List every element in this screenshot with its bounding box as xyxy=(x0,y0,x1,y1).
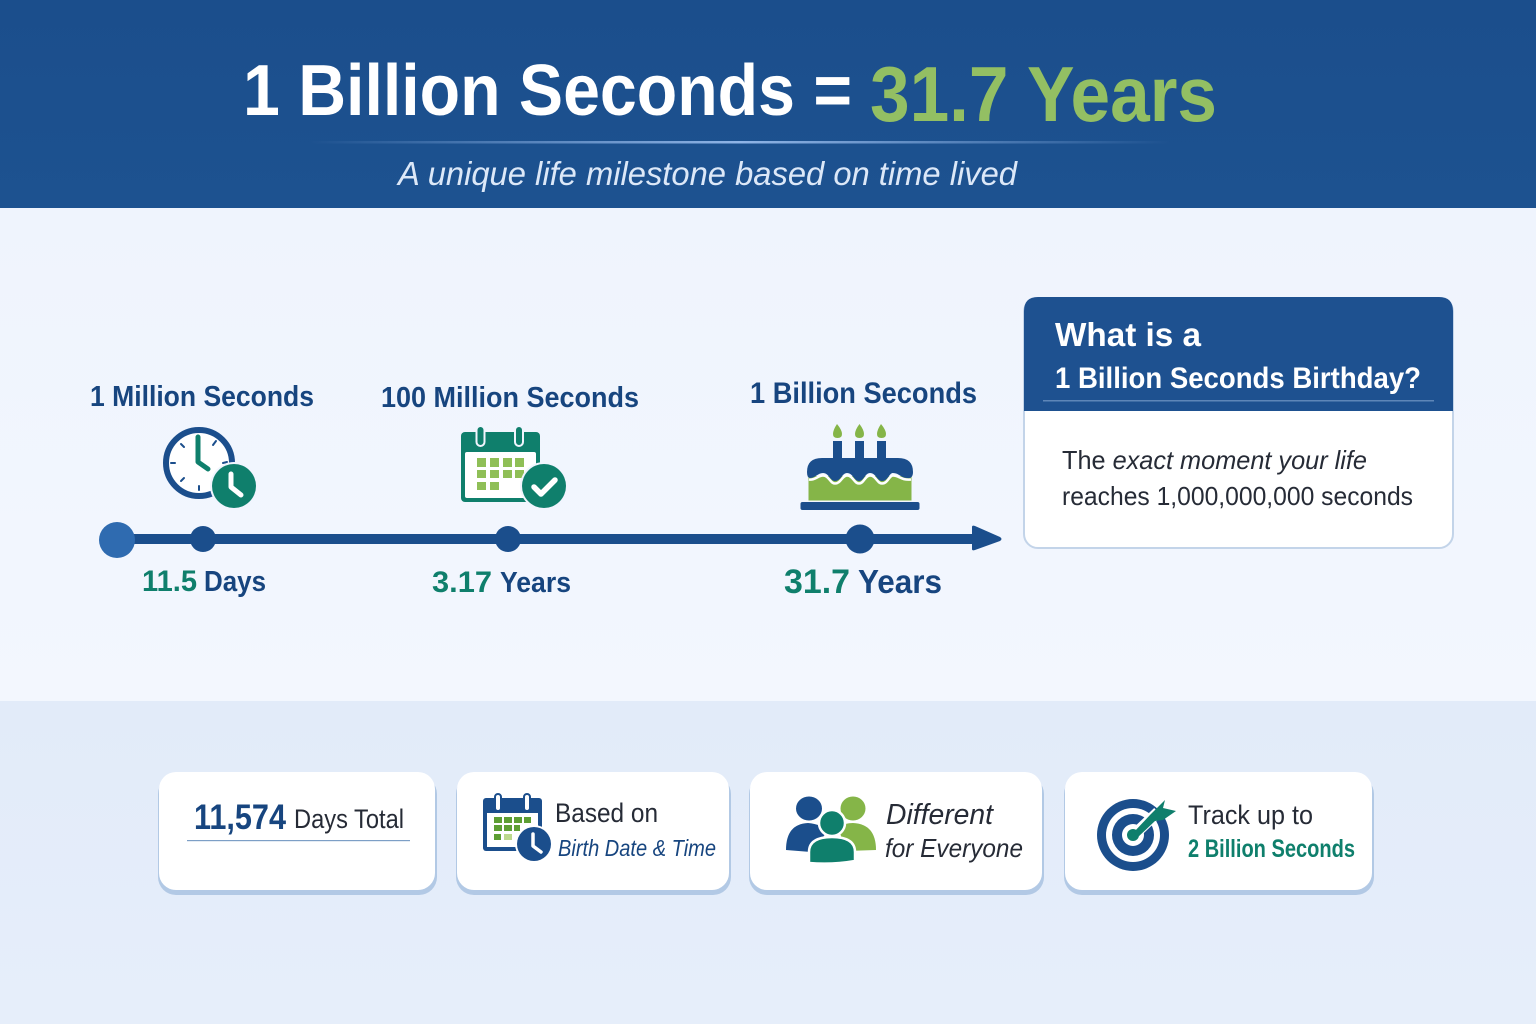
card text xyxy=(1188,800,1355,863)
milestone value xyxy=(432,566,571,599)
milestone dot 3 xyxy=(846,524,874,554)
card text: Based on xyxy=(555,798,658,828)
card: different for everyone xyxy=(749,772,1044,895)
milestone value: Days xyxy=(204,566,266,598)
panel heading: What is a xyxy=(1055,316,1202,353)
icon: people xyxy=(786,796,876,864)
title: 1 Billion Seconds = xyxy=(243,51,852,131)
timeline axis arrow xyxy=(117,526,1002,550)
milestone value xyxy=(784,563,942,601)
card text: 2 Billion Seconds xyxy=(1188,835,1355,863)
panel body text xyxy=(1062,445,1413,511)
icon: calendar with clock xyxy=(483,794,553,863)
lower band background xyxy=(0,701,1536,1024)
milestone value: 11.5 xyxy=(142,565,197,598)
icon: clock xyxy=(166,430,258,510)
panel: what is a 1 billion seconds birthday xyxy=(1024,297,1453,548)
card text xyxy=(555,798,716,861)
milestone value: 31.7 xyxy=(784,563,850,601)
main background xyxy=(0,208,1536,701)
card text xyxy=(885,799,1023,863)
card: 11,574 days total xyxy=(158,772,437,895)
milestone value: Years xyxy=(500,567,571,599)
milestone label: 100 Million Seconds xyxy=(381,382,639,414)
card: track up to 2 billion seconds xyxy=(1064,772,1374,895)
card text: Different xyxy=(886,799,995,831)
milestone: 1 million seconds xyxy=(90,381,314,598)
milestone: 1 billion seconds xyxy=(750,377,977,601)
timeline start dot xyxy=(99,522,135,558)
milestone value: Years xyxy=(858,563,942,600)
timeline xyxy=(99,522,1002,558)
milestone label: 1 Billion Seconds xyxy=(750,377,977,410)
title: 31.7 Years xyxy=(870,50,1217,138)
subtitle: A unique life milestone based on time lived xyxy=(396,155,1019,192)
card text: for Everyone xyxy=(885,833,1023,863)
panel body text: reaches 1,000,000,000 seconds xyxy=(1062,481,1413,511)
milestone: 100 million seconds xyxy=(381,382,639,599)
panel heading xyxy=(1024,297,1453,411)
milestone dot 2 xyxy=(495,526,521,552)
panel heading: 1 Billion Seconds Birthday? xyxy=(1055,362,1421,395)
milestone value: 3.17 xyxy=(432,566,492,599)
milestone value xyxy=(142,565,266,598)
milestone dot 1 xyxy=(190,526,216,552)
icon: calendar with check xyxy=(461,426,568,510)
icon: birthday cake xyxy=(800,424,920,510)
panel body text: The exact moment your life xyxy=(1062,445,1367,475)
icon: target with arrow xyxy=(1097,799,1176,871)
card: based on birth date and time xyxy=(456,772,731,895)
milestone label: 1 Million Seconds xyxy=(90,381,314,413)
card text: 11,574 xyxy=(194,798,286,837)
card text: Days Total xyxy=(294,804,404,834)
card text: Track up to xyxy=(1188,800,1313,830)
card text xyxy=(194,798,404,837)
header banner xyxy=(0,0,1536,208)
title xyxy=(243,50,1217,138)
card text: Birth Date & Time xyxy=(558,835,716,861)
